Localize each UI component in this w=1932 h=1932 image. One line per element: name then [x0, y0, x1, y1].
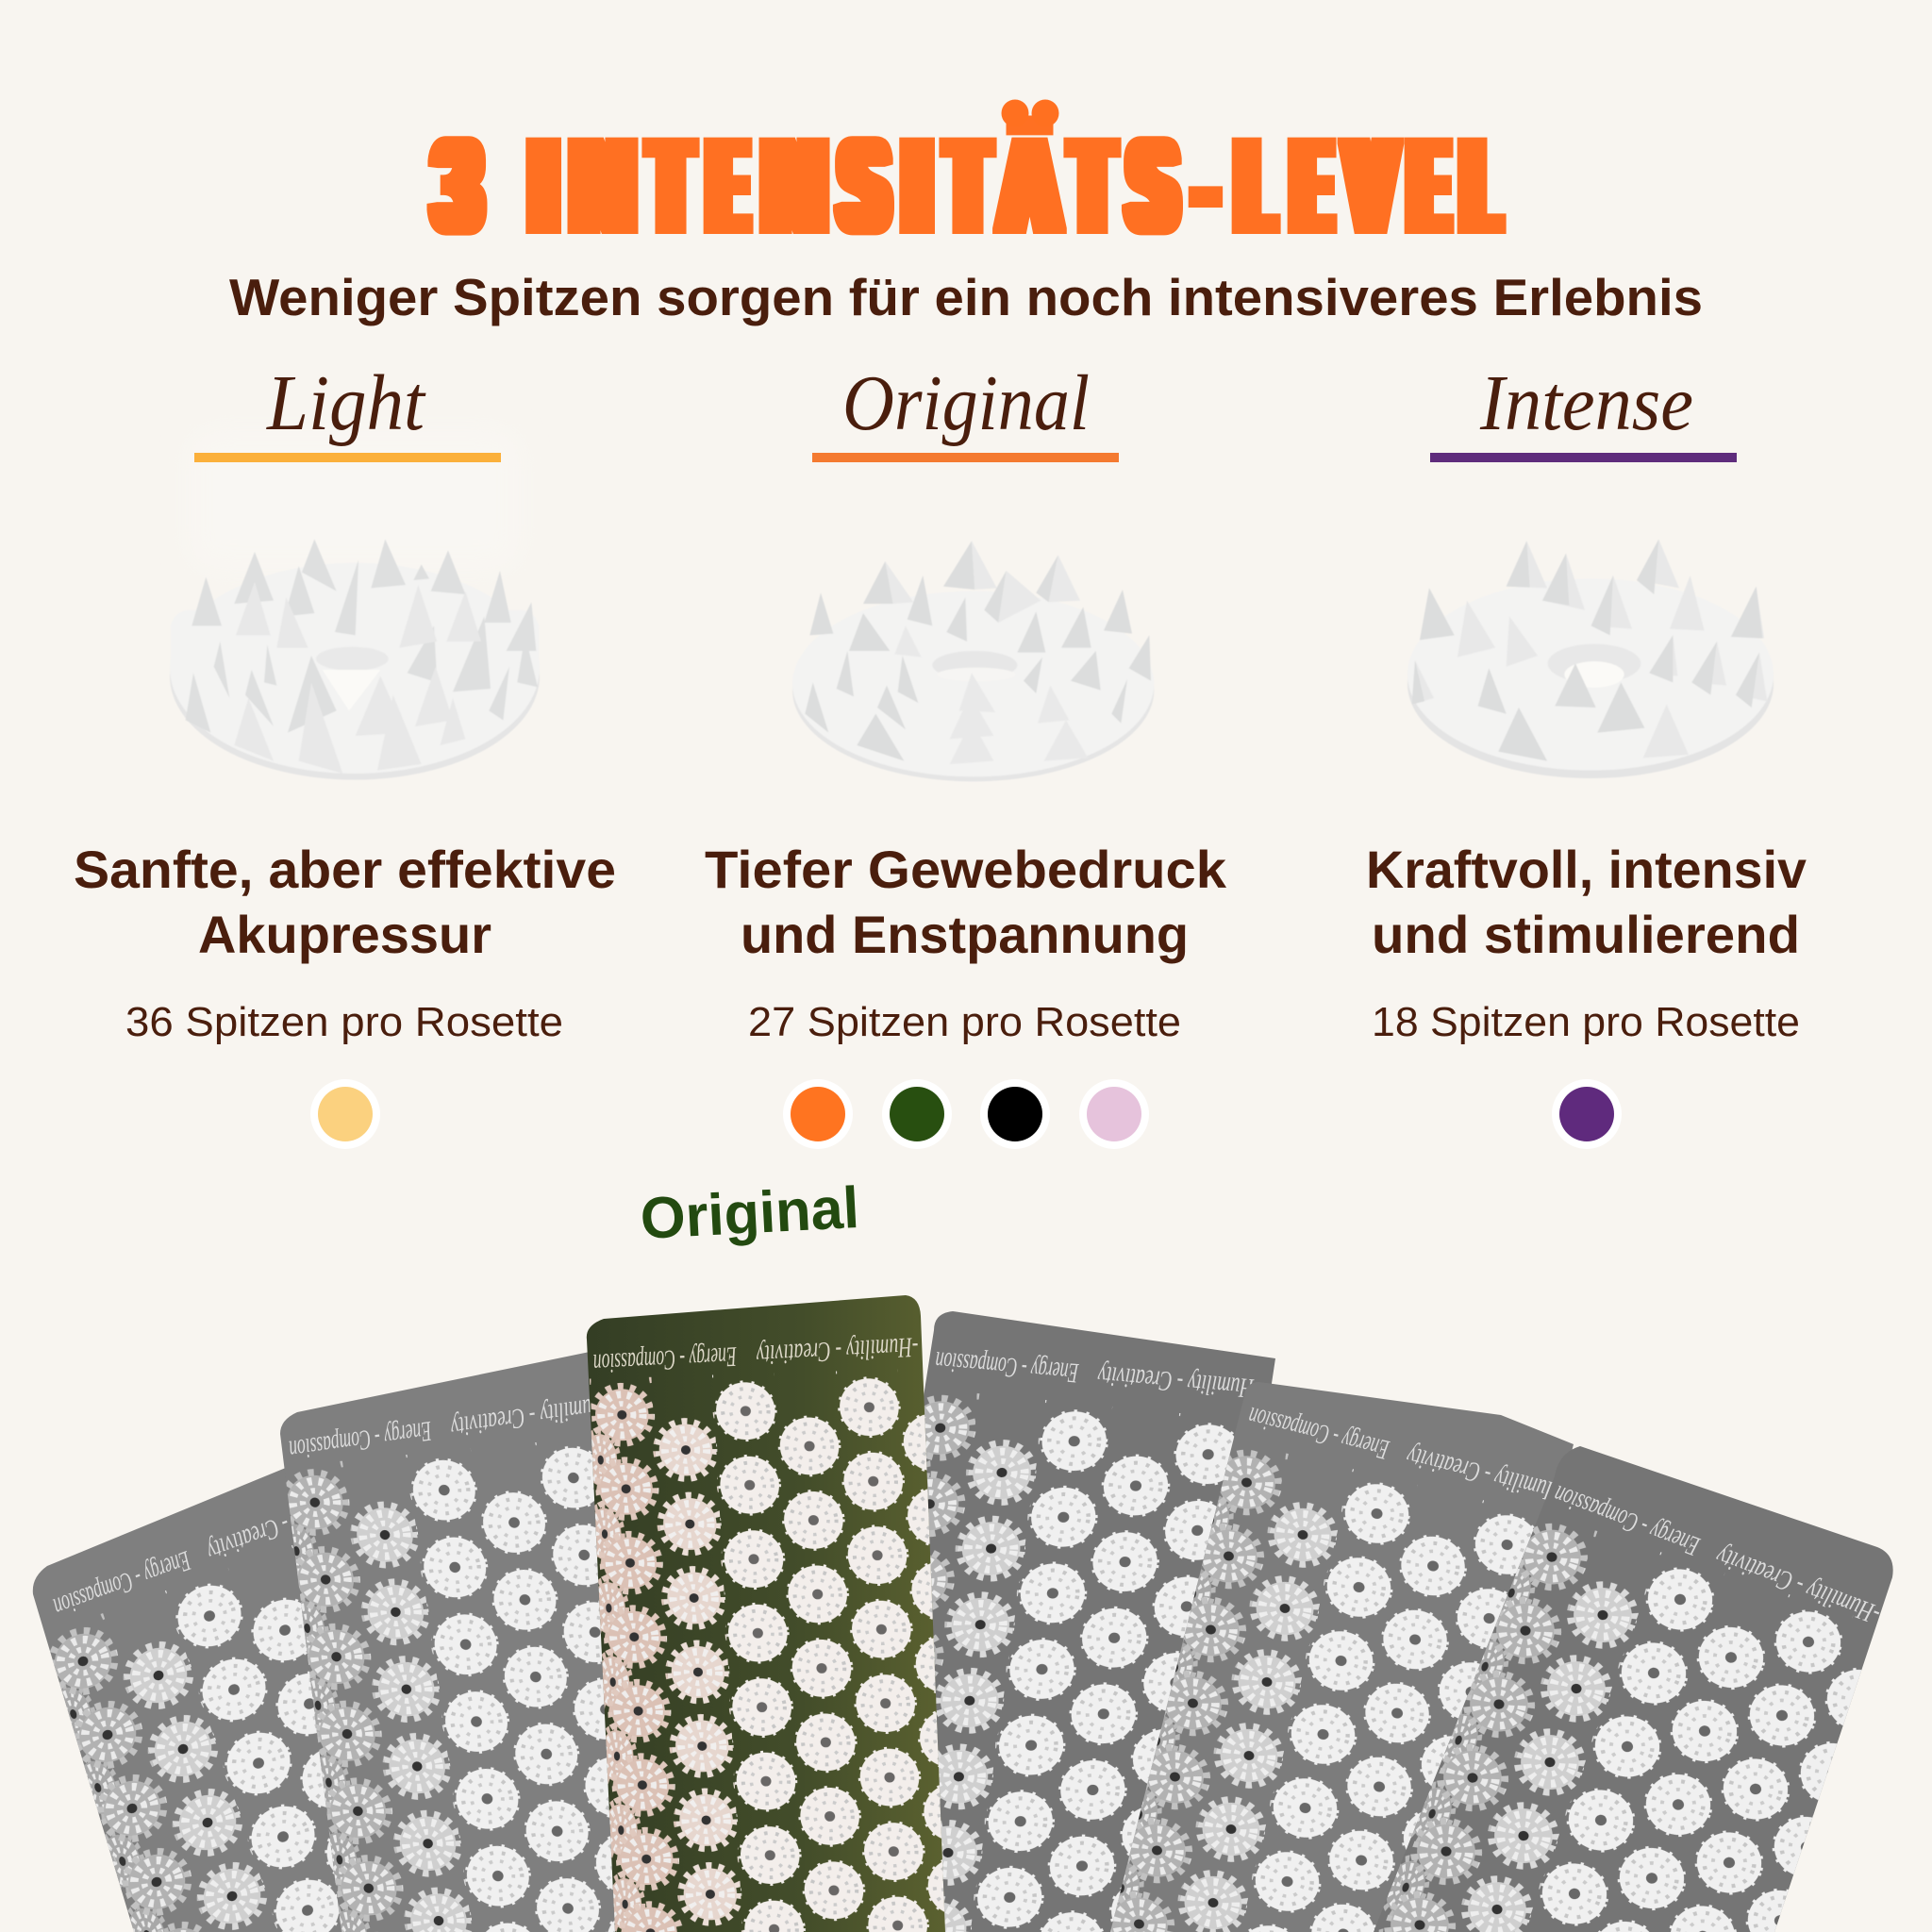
text: intense spike count: 18 Spitzen pro Rosette — [1372, 999, 1800, 1045]
text: intense benefit: Kraftvoll, intensiv — [1366, 840, 1807, 899]
title: S — [842, 111, 886, 259]
text: original benefit: Tiefer Gewebedruck — [705, 840, 1227, 899]
text: original benefit: und Enstpannung — [741, 905, 1189, 964]
underline: light — [194, 453, 501, 462]
title: L — [1240, 111, 1271, 259]
mat: fourth right grey — [1104, 1377, 1585, 1932]
title — [437, 100, 1496, 259]
underline: intense — [1430, 453, 1737, 462]
mat: second left grey: -Humility - Creativity — [448, 1390, 614, 1443]
label: original mat: Original — [639, 1175, 860, 1252]
colour swatch: intense — [1552, 1079, 1622, 1149]
subtitle: Weniger Spitzen sorgen für ein noch intensiveres Erlebnis — [229, 268, 1703, 326]
title: S — [1131, 111, 1174, 259]
title: N — [574, 111, 632, 259]
mat: far right grey: Energy - Compassion — [1550, 1479, 1704, 1562]
text: L — [1465, 111, 1496, 259]
mat: far right grey — [1358, 1434, 1915, 1932]
mat: central green original: -Humility - Creativity — [755, 1331, 919, 1371]
mat: far left grey: -Humility - Creativity — [203, 1482, 366, 1567]
icon: intense rosette with 18 spikes — [1407, 540, 1774, 778]
panel: intense — [1366, 359, 1807, 1149]
title: E — [1295, 111, 1328, 259]
mat: third right grey: Energy - Compassion — [934, 1345, 1080, 1389]
title: I — [905, 111, 929, 259]
heading: original: Original — [842, 359, 1090, 447]
colour swatch: light — [310, 1079, 380, 1149]
title: T — [950, 111, 986, 259]
mat: fourth right grey: -Humility - Creativity — [1403, 1440, 1569, 1509]
title: N — [765, 111, 824, 259]
underline: original — [812, 453, 1119, 462]
mat: fourth right grey: Energy - Compassion — [1245, 1401, 1392, 1466]
soft glow behind rosette — [189, 429, 521, 571]
title: Ä — [1002, 111, 1058, 259]
title: V — [1348, 111, 1393, 259]
text: light benefit: Akupressur — [198, 905, 491, 964]
mat: central green original: Energy - Compassion — [592, 1341, 738, 1379]
text: intense benefit: und stimulierend — [1372, 905, 1800, 964]
mat: far right grey: -Humility - Creativity — [1711, 1541, 1884, 1630]
title: I — [531, 111, 556, 259]
title: 3 — [437, 111, 478, 259]
colour swatches: original — [783, 1079, 1149, 1149]
title: T — [653, 111, 689, 259]
title: E — [1412, 111, 1445, 259]
text: light spike count: 36 Spitzen pro Rosette — [125, 999, 563, 1045]
panel: original — [705, 359, 1227, 1149]
mat: second left grey: Energy - Compassion — [287, 1415, 434, 1466]
title: T — [1074, 111, 1110, 259]
mat: central green original — [575, 1288, 953, 1932]
icon: light rosette with 36 spikes — [170, 540, 540, 780]
heading: intense: Intense — [1479, 359, 1693, 447]
mat: third right grey — [924, 1311, 1275, 1932]
title: - — [1198, 111, 1213, 259]
panel: light — [74, 359, 616, 1149]
mat: second left grey — [280, 1353, 615, 1932]
heading: light: Light — [266, 359, 426, 447]
mat: far left grey — [32, 1468, 341, 1932]
mat: third right grey: -Humility - Creativity — [1096, 1359, 1261, 1405]
text: light benefit: Sanfte, aber effektive — [74, 840, 616, 899]
icon: original rosette with 27 spikes — [792, 541, 1154, 781]
title: E — [711, 111, 744, 259]
text: original spike count: 27 Spitzen pro Rosette — [748, 999, 1181, 1045]
